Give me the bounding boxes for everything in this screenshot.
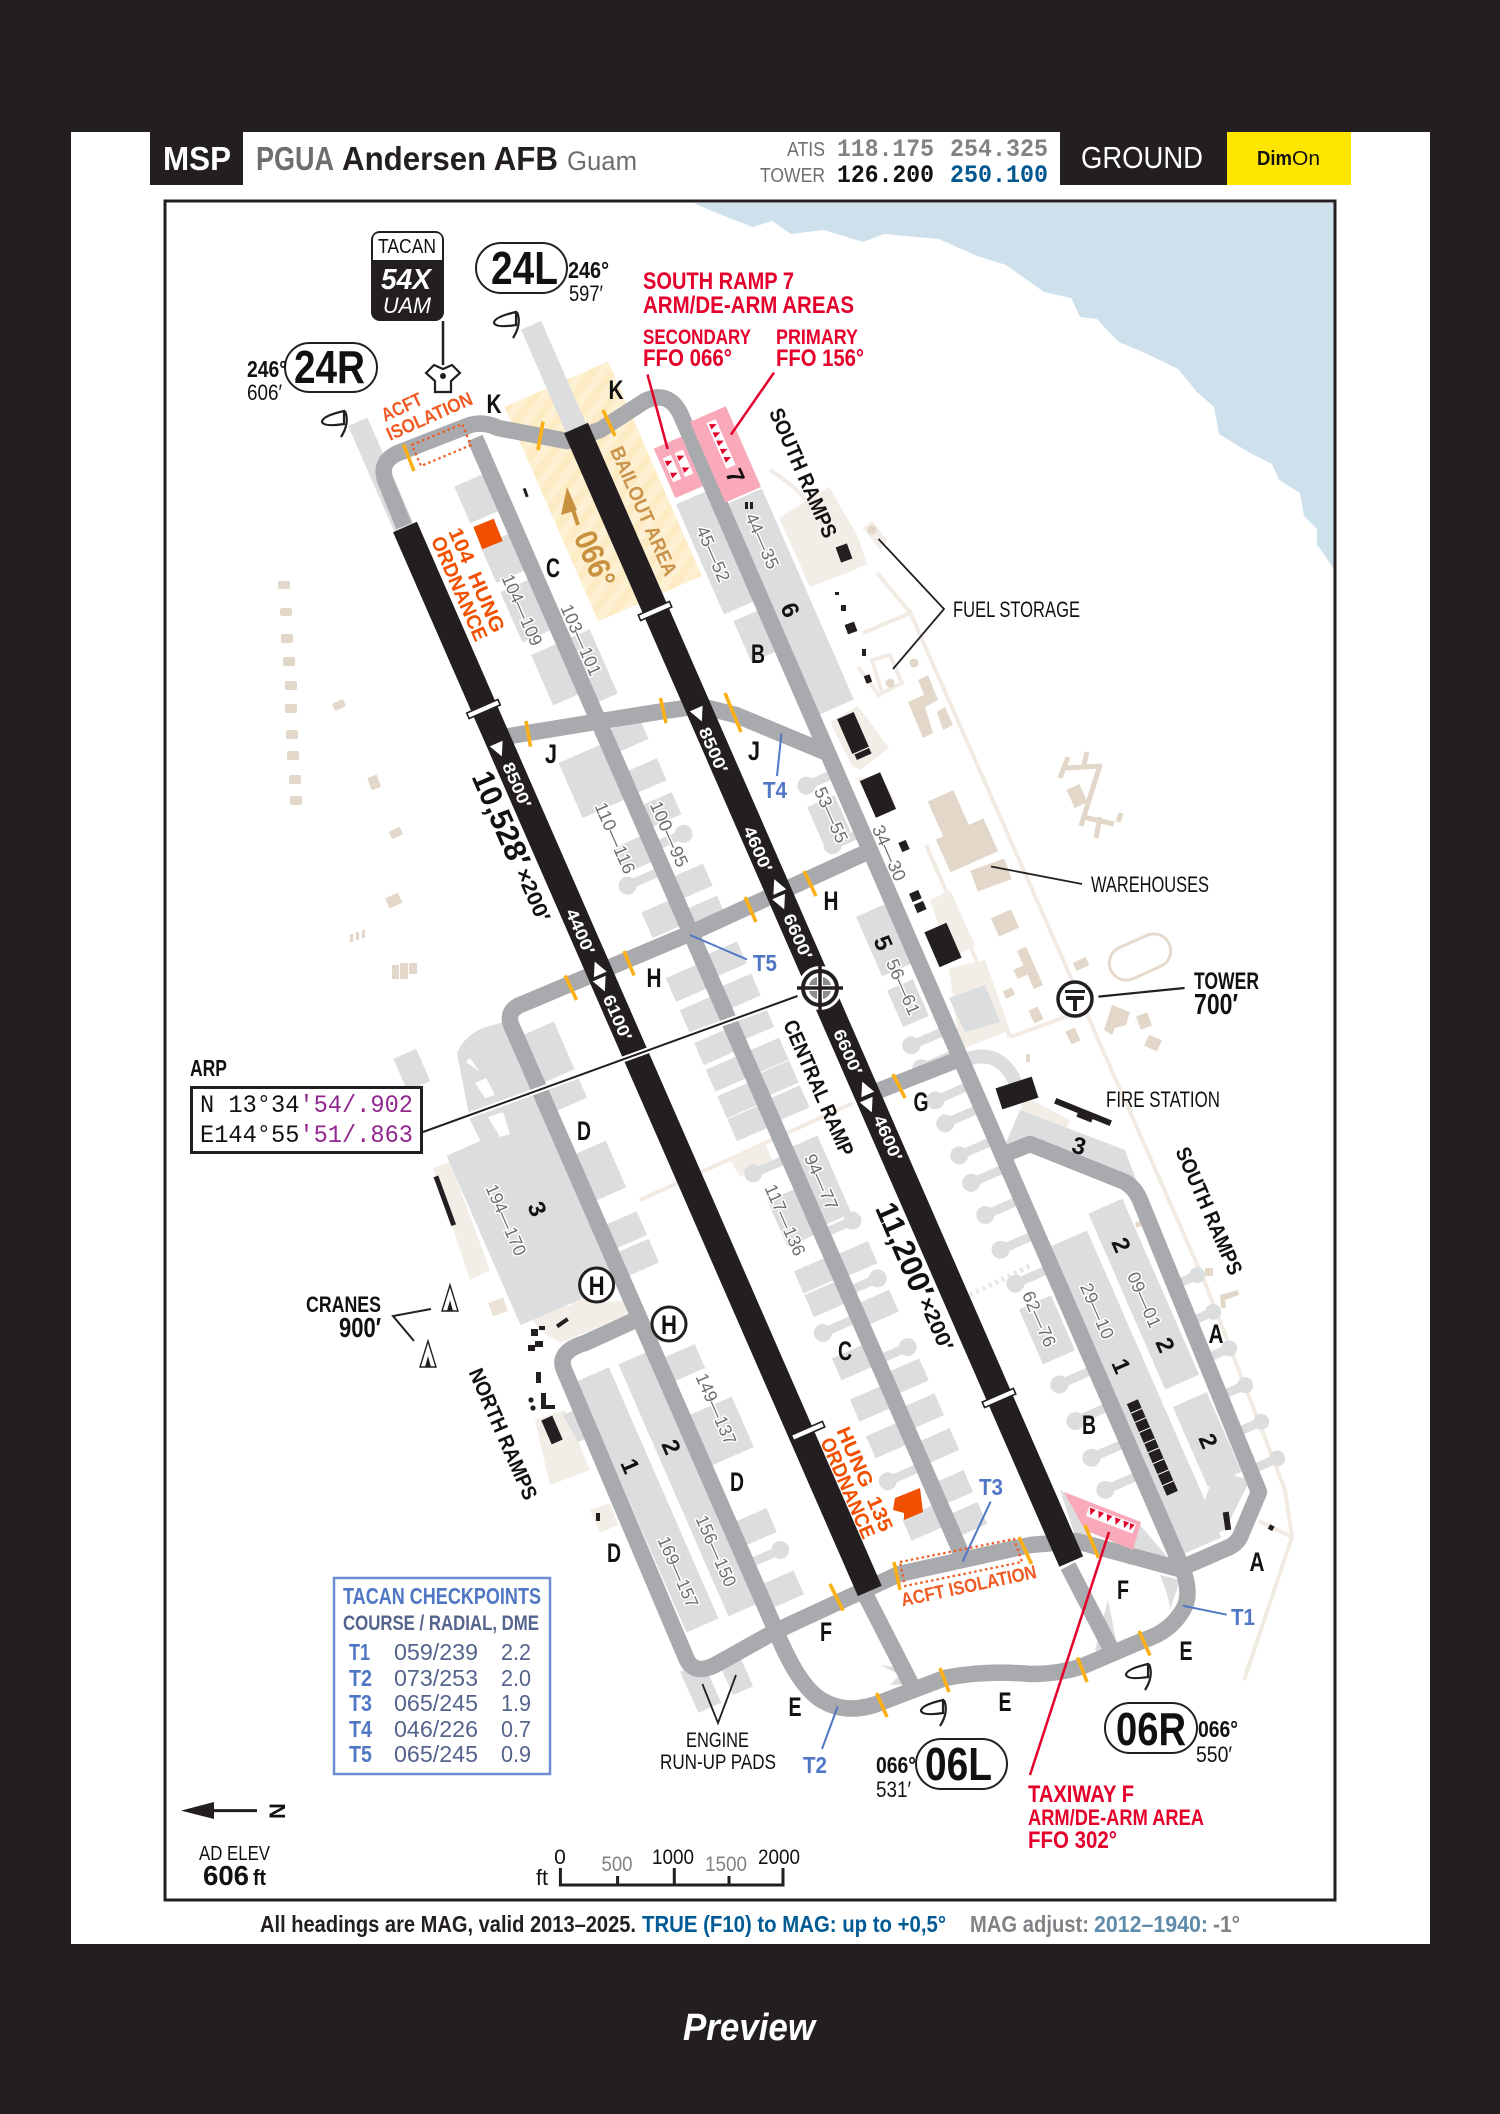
airport title [256,140,637,177]
checkpoint markers: T5 [753,950,777,976]
ramp numbers: 2 [1105,1234,1136,1257]
parking range labels: 149—137 [692,1370,740,1448]
runway label 24R: 24R [294,341,365,393]
ramp numbers: 7 [719,465,750,488]
ramp numbers: 2 [1149,1334,1180,1357]
ACFT isolation top: ISOLATION [383,389,476,446]
runway distance markers: 4400′ [562,906,598,957]
TACAN checkpoints table: T3 [349,1690,372,1716]
taxiway letters: C [546,553,560,583]
parking range labels: 53—55 [810,784,852,846]
bailout labels: 066° [567,525,623,593]
checkpoint markers: T1 [1231,1604,1255,1630]
helipads [580,1268,686,1341]
frequencies: 126.200 [837,161,934,190]
runway distance markers [490,706,906,1164]
TACAN checkpoints table: 2.2 [501,1639,531,1665]
secondary pad [654,437,703,498]
south ramps 2 [1088,1199,1242,1487]
runway distance markers: 6600′ [779,911,816,962]
runway label 24R: 246° [247,356,287,382]
TACAN checkpoints table: 065/245 [394,1741,478,1767]
scale bar [536,1846,800,1890]
frequencies: 254.325 [950,135,1048,164]
footer note [260,1911,1240,1937]
warehouses [991,866,1209,897]
footer note: MAG adjust: [970,1911,1089,1937]
ramp area names: NORTH RAMPS [464,1365,541,1503]
runway distance markers: 4600′ [739,823,776,875]
TACAN checkpoints table: 065/245 [394,1690,478,1716]
hung ordnance 135: ORDNANCE [815,1435,879,1542]
helipads: H [661,1310,677,1340]
checkpoint markers: T2 [803,1752,827,1778]
TACAN checkpoints table: 2.0 [501,1665,531,1691]
tower [1058,968,1259,1021]
parking range labels: 194—170 [482,1181,530,1259]
red callout taxiway F [1028,1532,1204,1854]
ramp numbers: 6 [774,599,805,622]
TACAN checkpoints table [334,1578,550,1774]
cranes: CRANES [306,1292,381,1317]
parking range labels [482,510,1165,1611]
red callout taxiway F: TAXIWAY F [1028,1781,1134,1808]
TACAN checkpoints table: COURSE / RADIAL, DME [343,1612,539,1635]
north ramp 3 [447,1114,617,1325]
red callout taxiway F: ARM/DE-ARM AREA [1028,1805,1204,1830]
TACAN checkpoints table: T1 [349,1639,370,1665]
runway label 06L: 066° [876,1752,916,1778]
taxiway letters [486,375,1264,1722]
red callout south ramp 7: FFO 156° [776,345,864,372]
runway label 24L: 597′ [569,281,603,306]
TACAN navaid [371,231,460,392]
taxiway letters: F [1117,1575,1129,1605]
bailout labels [561,443,681,593]
TACAN checkpoints table: T2 [349,1665,372,1691]
dim button [1227,132,1351,185]
frequencies [760,135,1048,190]
warehouses blocks [920,784,1162,1062]
taxiway letters: D [577,1116,591,1146]
ARP coordinates [190,1055,422,1152]
parking range labels: 110—116 [591,799,639,877]
ramp 45-52 [676,492,775,665]
ACFT isolation top [378,389,476,466]
taxiway letters: K [486,389,502,419]
checkpoint markers: T4 [763,777,787,803]
TACAN checkpoints table: 073/253 [394,1665,478,1691]
black buildings [434,488,1275,1531]
runway distance markers: 8500′ [695,724,731,776]
runway label 24L: 246° [568,257,609,283]
ground button [1060,132,1227,185]
ramp numbers [521,465,1223,1478]
arm de-arm pads [654,406,1141,1550]
taxiway letters: E [998,1687,1012,1717]
checkpoint markers: T3 [979,1474,1003,1500]
parking range labels: 34—30 [868,822,910,884]
hung ordnance 104: 104 HUNG [444,525,509,636]
TACAN navaid: TACAN [378,236,436,258]
runway distance markers: 6100′ [599,992,635,1044]
ACFT isolation bottom: ACFT ISOLATION [899,1562,1039,1611]
white sheet [71,132,1430,1944]
water [694,203,1334,570]
footer note: 2012–1940: [1094,1911,1208,1937]
TACAN checkpoints table: 046/226 [394,1716,478,1742]
scale bar: 0 [554,1846,566,1869]
parking range labels: 29—10 [1076,1280,1118,1342]
apron cut-outs [466,1058,510,1137]
stands [610,717,991,1535]
taxiway letters: D [730,1467,744,1497]
runway label 24L: 24L [491,242,558,294]
scale bar: 2000 [758,1846,800,1869]
runway dimensions [465,766,957,1354]
airport title: Guam [567,146,637,176]
north arrow [181,1802,290,1819]
fence line [970,1265,1032,1295]
airport title: Andersen AFB [342,140,558,177]
taxiway letters: E [1180,1636,1192,1666]
aerodrome elevation: ft [253,1865,267,1890]
parking range labels: 117—136 [761,1181,809,1259]
red callout taxiway F: FFO 302° [1028,1827,1117,1854]
taxiways [384,397,1259,1708]
red callout south ramp 7 [643,268,864,449]
ramps and aircraft stands [193,337,1305,1765]
ARP coordinates: N 13°34′54/.902 [200,1091,413,1120]
runway 06L 24R [393,522,882,1596]
footer note: -1° [1213,1911,1240,1937]
hold lines [404,410,1150,1717]
parking range labels: 09—01 [1123,1269,1165,1331]
red callout south ramp 7: PRIMARY [776,326,858,349]
runway label 06L: 06L [925,1738,992,1790]
primary pad [690,406,761,502]
engine run-up pads: RUN-UP PADS [660,1751,776,1774]
ARP coordinates: E144°55′51/.863 [200,1121,413,1150]
frequencies: 118.175 [837,135,934,164]
taxiway letters: J [545,739,557,769]
tan roads and buildings [278,470,1292,1680]
ramp numbers: 5 [867,932,898,955]
header [150,132,1351,190]
fuel storage: FUEL STORAGE [953,597,1080,622]
ramp numbers: 1 [1105,1355,1136,1378]
footer note: All headings are MAG, valid 2013–2025. [260,1911,636,1937]
parking range labels: 62—76 [1018,1288,1060,1350]
TACAN checkpoints table: 0.7 [501,1716,531,1742]
dim button: Dim [1257,148,1292,170]
parking range labels: 56—61 [882,956,924,1018]
bailout area [505,362,702,621]
scale bar: 500 [602,1853,632,1876]
main frame [165,201,1335,1900]
ramp numbers: 2 [1192,1430,1223,1453]
scale bar: 1500 [705,1853,747,1876]
ramp area names [464,405,1247,1503]
runway label 24R [247,341,377,405]
runway label 06L: 531′ [876,1777,911,1802]
runway 06R 24L [564,423,1083,1567]
ARP coordinates: ARP [190,1055,227,1081]
runway label 24R: 606′ [247,380,282,405]
taxiway letters: H [824,886,838,916]
taxiway letters: G [914,1087,928,1117]
ramp numbers: 2 [655,1436,686,1459]
TACAN navaid: 54X [381,264,433,296]
scale bar: ft [536,1865,548,1890]
parking range labels: 156—150 [692,1512,740,1590]
runway distance markers: 6600′ [829,1026,866,1078]
red callout south ramp 7: SECONDARY [643,326,751,349]
runway label 24L [476,242,609,306]
runway dimensions: ×200′ [511,865,554,925]
taxiway letters: J [748,736,760,766]
apron shapes [457,985,1250,1713]
parking range labels: 44—35 [741,510,783,572]
TACAN checkpoints table: 1.9 [501,1690,531,1716]
runways [393,423,1083,1596]
runway label 06R [1105,1703,1238,1767]
ACFT isolation bottom [899,1539,1039,1611]
taxiway letters: A [1250,1547,1264,1577]
lollipop stands [476,717,1275,1667]
TACAN checkpoints table: 0.9 [501,1741,531,1767]
tower: 700′ [1194,989,1238,1021]
TACAN checkpoints table: TACAN CHECKPOINTS [343,1583,541,1609]
taxiway letters: D [607,1538,621,1568]
taxiway letters: C [838,1336,852,1366]
taxiway letters: F [820,1617,832,1647]
runway dimensions: 11,200′ [868,1197,941,1303]
fire station: FIRE STATION [1106,1087,1220,1112]
TACAN navaid: UAM [383,293,432,318]
north ramp 2 [618,1352,756,1616]
engine run-up pads [660,1675,776,1774]
parking range labels: 94—77 [800,1151,842,1213]
frequencies: TOWER [760,165,825,187]
ramp area names: SOUTH RAMPS [764,405,841,541]
scale bar: 1000 [652,1846,694,1869]
footer note: TRUE (F10) to MAG: up to +0,5° [642,1911,946,1937]
runway label 06R: 550′ [1196,1742,1232,1767]
hung ordnance 104 [426,519,509,645]
runway distance markers: 4600′ [869,1112,906,1164]
runway break marks [467,601,1016,1441]
taxiway letters: A [1208,1319,1224,1349]
taxiway letters: K [608,375,624,405]
hung ordnance 135 [815,1424,923,1542]
red callout south ramp 7: SOUTH RAMP 7 [643,268,794,295]
ARP symbol [797,965,843,1011]
barracks [1060,752,1121,838]
ramp numbers: 3 [1069,1132,1089,1161]
scattered tan blocks [278,581,1239,1316]
runway dimensions: 10,528′ [465,766,537,872]
hung ordnance 104: ORDNANCE [426,533,491,645]
runway label 06L [876,1738,1007,1802]
frequencies: ATIS [787,139,825,161]
checkpoint markers [690,734,1255,1778]
ARP leader line [423,996,798,1132]
runway distance markers: 8500′ [498,759,535,811]
parking range labels: 104—109 [498,571,546,649]
parking range labels: 100—95 [646,798,692,870]
runway label 06R: 066° [1198,1716,1238,1742]
runway label 06R: 06R [1116,1703,1186,1755]
ramp area names: SOUTH RAMPS [1171,1144,1247,1279]
dim button: On [1292,148,1320,170]
taxiway letters: H [646,963,662,993]
taxiway letters: B [1082,1410,1096,1440]
hung ordnance 135: HUNG 135 [832,1424,897,1535]
aerodrome elevation [199,1843,271,1891]
south ramp 6 [725,489,854,715]
ACFT isolation top: ACFT [378,389,426,427]
red callout south ramp 7: ARM/DE-ARM AREAS [643,292,854,319]
taxiway F pad [1064,1492,1141,1550]
engine run-up pads: ENGINE [686,1729,749,1752]
taxiway letters: E [788,1692,802,1722]
cranes: 900′ [339,1312,381,1343]
TACAN checkpoints table: T5 [349,1741,372,1767]
frequencies: 250.100 [950,161,1048,190]
ramp parking row black [1127,1399,1178,1496]
bailout labels: BAILOUT AREA [605,443,681,579]
ground button: GROUND [1081,140,1203,175]
runway extensions [341,321,596,533]
tower: TOWER [1194,968,1259,995]
airport title: PGUA [256,140,334,177]
code box MSP: MSP [163,140,231,177]
helipads: H [589,1271,605,1301]
TACAN checkpoints table: T4 [349,1716,372,1742]
ramp numbers: 1 [614,1455,645,1478]
south ramp 1 [1049,1231,1221,1554]
red callout south ramp 7: FFO 066° [643,345,732,372]
north arrow: N [265,1803,290,1819]
TACAN checkpoints table: 059/239 [394,1639,478,1665]
taxiway letters: B [751,639,765,669]
racetrack [1104,928,1176,986]
wind socks [322,312,1151,1726]
aerodrome elevation: AD ELEV [199,1843,271,1865]
warehouses: WAREHOUSES [1091,872,1209,897]
cranes [306,1285,458,1367]
aerodrome elevation: 606 [203,1860,249,1891]
ramp 5 [856,904,911,976]
runway dimensions: ×200′ [914,1294,957,1354]
north ramp 1 [577,1367,719,1633]
code box MSP [150,132,243,185]
ramp area names: CENTRAL RAMP [778,1017,858,1160]
parking range labels: 45—52 [692,523,734,585]
parking range labels: 103—101 [557,601,605,679]
parking range labels: 169—157 [654,1533,702,1611]
ARP leader halo [423,996,798,1132]
fuel storage [878,539,1080,669]
ramp numbers: 3 [521,1198,552,1221]
preview caption: Preview [683,2007,817,2049]
